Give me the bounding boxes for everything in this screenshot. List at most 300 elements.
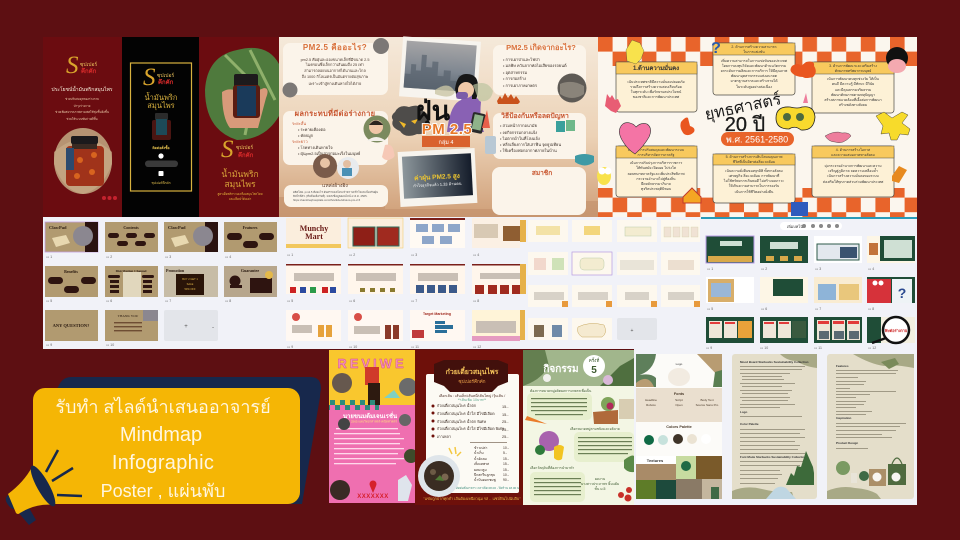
panel: PM2.5 infographic [279,36,598,217]
slide: features document: Features [836,364,849,368]
slide: brand board: Headline [645,398,657,402]
slide 1 [45,222,98,252]
card: members [492,167,586,215]
service list: รับทำ สไลด์นำเสนออาจารย์ [55,396,271,417]
icon: megaphone [6,463,59,525]
heading: PM 2.5 dust: ฝุ่น [416,96,451,128]
icons: shirts and mask [556,120,594,166]
center gold frame [130,63,192,191]
slides row 2 [528,252,700,275]
card: causes of PM2.5: PM2.5 เกิดจากอะไร? [506,42,576,52]
icon: phone [158,153,164,159]
slide numbers: ▭ 7 [411,299,417,303]
megaphone sound lines [46,450,82,496]
card: body effects: ระยะสั้น [292,119,306,126]
slide numbers: ▭ 9 [46,343,52,347]
activity credit [581,477,619,491]
menu noodle list: เกาเหลา [437,435,451,439]
menu noodle list: 15.- [502,413,509,417]
poster figures [332,367,417,405]
slide 1: ClawPad [49,225,67,230]
redacted phone number [145,160,178,167]
slide numbers: ▭ 1 [287,253,293,257]
poster header [523,350,634,386]
mascot: question mark: ? [711,40,721,57]
left jar photo [54,128,112,194]
strategy card 4: ให้ทันสมัย เปิดเผย โปร่งใส [636,165,677,170]
slide: mood board document: Color Palette [740,422,759,426]
slide numbers: ▭ 4 [868,267,874,271]
strategy card 3: คนดี มีความรู้ มีทักษะ มีวินัย [832,81,874,86]
panel: activity poster [523,350,634,505]
strategy card 1: ของชาติและการพัฒนาประเทศ [633,95,680,99]
right logo: S [221,136,234,163]
right title: สมุนไพร [224,179,256,190]
strategy card 1: รวมถึงการสร้างความสงบเรียบร้อย [630,84,682,89]
slide numbers: ▭ 7 [815,307,821,311]
slide numbers: ▭ 3 [165,255,171,259]
panel: green chalkboard slide deck overview [701,217,917,349]
service list: Poster , แผ่นพับ [101,481,225,501]
card: causes of PM2.5 [493,42,586,95]
slide 9: ANY QUESTION? [53,323,89,328]
decorative rays [449,447,461,456]
activity credit: ชั้น ม.5 [595,486,606,491]
child photo [364,116,390,142]
slide 2 [105,222,158,252]
menu noodle list: ก๋วยเตี๋ยวสมุนไพร น้ำตก พิเศษ [437,418,486,425]
polaroid: PM2.5 news [398,148,477,207]
slides row 3: พิษต่อร่างกาย [884,328,907,333]
strategy card 5: เศรษฐกิจ สิ่งแวดล้อม การพัฒนาที่ [729,173,780,178]
strategy card 2: เพิ่มความสามารถในการแข่งขันของประเทศ [721,58,788,63]
slide numbers: ▭ 12 [473,345,481,349]
left logo: S [66,52,79,79]
strategy card 2: มาตรฐานสากลและสร้างรายได้ [731,78,777,83]
menu title banner [434,360,508,392]
menu noodle list: เลือกเส้น : เส้นเล็ก/เส้นหมี่/เส้นใหญ่ /วุ้นเส้น / [439,392,505,399]
polaroid: hazy city [399,36,481,102]
center title: น้ำมันพริก [145,92,177,102]
slide 7: BUY 2 GET 1 [182,277,198,281]
right title [221,168,259,190]
strategy card 2: พัฒนาอุตสาหกรรมแห่งอนาคต [731,74,778,79]
menu noodle list: 25.- [502,435,509,439]
panel: 20-year national strategy [597,37,917,217]
slide 3 [410,218,465,248]
strategy card 1 [616,62,697,112]
slide: brand board: Script [675,398,683,402]
rainbow strip [701,217,917,219]
card: references [284,182,388,207]
strategy card 3: เน้นการพัฒนาคนทุกช่วงวัย ให้เป็น [827,75,879,82]
slide numbers: ▭ 8 [225,299,231,303]
skyline silhouette [279,185,598,217]
menu noodle list [432,392,509,439]
strategy card 4: กระจายอำนาจไปสู่ท้องถิ่น [636,176,676,181]
fire illustration [497,93,520,104]
toolbar [780,222,842,230]
menu divider and extras: 15.- [503,462,509,466]
left heading: ประโยชน์น้ำมันพริกสมุนไพร [51,84,113,93]
checker top [598,37,917,66]
menu noodle list: 25.- [502,420,509,424]
card: body effects: • โรคทางเดินหายใจ [298,145,333,150]
slides row 3 [286,310,520,341]
card: prevention: วิธีป้องกันหรือลดปัญหา [501,111,569,120]
slide numbers: ▭ 5 [707,307,713,311]
card: prevention: • หลีกเลี่ยงการใส่เสาฟืน จุดธูปเทียน [500,142,561,148]
strategy card 5: เน้นความยั่งยืนของทุกมิติ ทั้งทางสังคม [725,168,783,174]
slide: features document [827,354,914,499]
right logo: คึกคัก [238,151,254,159]
card: members: สมาชิก [532,169,552,177]
card: body effects: ระยะยาว [292,139,308,144]
center jar [152,113,171,140]
slides row 3: Target Marketing [423,312,451,316]
slide numbers: ▭ 10 [349,345,357,349]
strategy card 4: ยึดหลักธรรมาภิบาล [641,182,671,186]
center title [145,92,177,110]
dust monster [392,106,429,136]
slide: brand board: Roboto [646,403,656,407]
activity credit: นางสาวประภาพร ยิ้มแย้ม [581,481,619,486]
slide numbers: ▭ 3 [815,267,821,271]
slide numbers: ▭ 10 [760,346,768,350]
mascot: orange splash [790,62,816,78]
activity text card 1: ต้องการหมวดหมู่ผลิตผลการเกษตรเพื่อเป็น [530,387,592,393]
woman with mask [435,74,493,132]
card: references: แหล่งอ้างอิง [322,182,348,189]
card: what is PM2.5: ไมครอนซึ่งเล็กกว่าเส้นผมถึง 25 เท่า [305,61,364,67]
slide numbers: ▭ 5 [46,299,52,303]
strategy card 1: ในทุกระดับ เพื่อรักษาผลประโยชน์ [631,89,682,95]
toolbar: เพิ่มบทโน้ต [787,224,806,229]
noodle bowl photo [418,455,460,497]
left benefits text: บำรุงร่างกาย [74,104,91,109]
strategy card 3: สร้างสภาพแวดล้อมที่เอื้อต่อการพัฒนา [824,97,882,102]
mascot: heart [619,123,651,154]
slide 2: Contents [123,225,139,230]
menu card [426,374,519,493]
slide numbers: ▭ 9 [706,346,712,350]
slide: mood board document: Font Mode Starbucks Sustainability Collection [740,455,806,459]
icon: dust ball top [373,38,389,54]
slide numbers [707,267,874,311]
badge: group 4: กลุ่ม 4 [439,140,453,146]
contact text: ติดต่อสั่งซื้อ [152,144,170,150]
title: strategy 20 years: ยุทธศาสตร์ [703,89,783,125]
slide: Munchy Mart cover: Munchy [300,224,328,233]
strategy card 2: โดยการลงทุนวิจัยและพัฒนาด้านนวัตกรรม [722,63,786,69]
poster heading: REVIWE [337,356,407,371]
menu noodle list: 15.- [502,405,509,409]
strategy card 6: มุ่งกระจายอำนาจการพัฒนาและความ [824,164,882,169]
slide numbers: ▭ 12 [868,346,876,350]
card: references: พิษใกล้ตัว. [สืบค้นเมื่อวันที่]. แหล่งข้อมูลออนไลน์ ๔ ต.ค. 2565. [293,194,368,198]
strategy card 2: 2. ด้านการสร้างความสามารถ [731,45,777,49]
mascot: yellow star cross [876,112,910,140]
slides row 2 [706,277,915,303]
slide 2 [348,218,403,248]
polaroid: PM2.5 news: กำไรธุรกิจแล้ว 1.33 ล้านคน [413,181,462,189]
strategy card 3: ศักยภาพทรัพยากรมนุษย์ [835,69,871,74]
vegetables basket [593,397,634,424]
tomatoes [618,487,632,502]
mascot: blue clapper [791,202,808,216]
card: what is PM2.5: สามารถลอยบนอากาศได้นานและไกล [304,68,366,73]
slide numbers: ▭ 7 [165,299,171,303]
panel: Diamond Grade slide deck overview [520,217,701,349]
slide numbers: ▭ 11 [411,345,419,349]
slide 4 [224,222,277,252]
strategy card 6: เจริญสู่ภูมิภาค ลดความเหลื่อมล้ำ [828,168,878,173]
slide 7 [164,266,218,297]
center logo: ซุปเปอร์ [157,72,174,79]
checker band [329,400,379,410]
left benefits text: ช่วยเพิ่มสมรรถภาพทางเพศให้ชุ่มชื้นยิ่งขึ้น [55,109,109,115]
panel: herb chili oil brochure [43,37,279,217]
slide numbers: ▭ 2 [761,267,767,271]
menu noodle list: ก๋วยเตี๋ยวสมุนไพร น้ำตก [437,402,476,409]
card: body effects [283,107,388,165]
slide 4 [472,218,520,248]
cabbage and pepper [535,431,564,460]
poster sub-heading: ม.4/6 2565 แผนวิทยาศาสตร์-คณิตศาสตร์ [343,420,397,424]
slides row 1 [528,220,700,242]
strategy card 3: และมีคุณธรรมจริยธรรม [835,87,871,93]
heading: PM 2.5 dust [416,96,472,138]
heading: PM 2.5 dust: PM 2.5 [422,121,472,138]
strategy card 3: 3. ด้านการพัฒนาและเสริมสร้าง [829,64,877,68]
poster header: กิจกรรม [543,363,579,375]
center logo: คึกคัก [158,78,174,86]
slide 10 [105,310,158,341]
slide: brand board: Colors Palette [666,425,692,429]
menu divider and extras: 10.- [503,446,509,450]
leaf right [624,456,634,472]
card: prevention: • งดกิจกรรมกลางแจ้ง [500,130,537,135]
strategy card 6: 4. ด้านการสร้างโอกาส [836,147,871,152]
icon: dust ball left [282,82,298,98]
card: what is PM2.5: pm2.5 คือฝุ่นละอองขนาดเล็กที่มีขนาด 2.5 [301,56,369,63]
menu divider and extras: 10.- [503,473,509,477]
slide: brand board: Source Sans Pro [696,403,719,407]
mascot: pink hand [605,94,621,113]
menu divider and extras: ข้าวเปล่า [474,446,488,450]
card: body effects: • ระคายเคืองตอ [298,127,326,132]
menu noodle list: 25.- [502,428,509,432]
slide numbers: ▭ 6 [349,299,355,303]
activity text card 2: เลือกหมวดหมู่ตามชนิดและอธิบาย [570,426,620,431]
slide: mood board document [732,354,817,499]
slide numbers: ▭ 4 [473,253,479,257]
activity text card 3 [530,465,585,502]
slides row 2: ? [898,285,906,301]
slides row 3 [706,317,915,343]
left logo: ซุปเปอร์ [80,61,97,68]
menu divider and extras [456,442,520,490]
menu noodle list: ก๋วยเตี๋ยวสมุนไพร น้ำใส มีไข่มีเลือด พิเศษ [437,425,505,432]
slides row 4: + [631,328,634,334]
right subtitle: และเห็ดนำ้ตับเต่า [229,195,252,201]
menu divider and extras: เห็ดเทพรส [474,460,490,466]
page dots [102,196,117,200]
slide numbers: ▭ 10 [106,343,114,347]
center title: สมุนไพร [147,101,175,110]
slide 7: 50% OFF [184,287,196,291]
card: references: https://samitivejhospitals.com/th/article/what-is-pm-2-5 [293,198,361,202]
panel: review poster [329,350,418,503]
menu divider and extras: น้ำเก็บ [474,449,484,455]
slide 8 [224,266,277,297]
mascot: yellow duck [597,167,612,185]
photos: patients [313,154,359,179]
menu divider and extras: 15.- [503,468,509,472]
panel: noodle menu [415,350,523,505]
strategy card 2: ในการแข่งขัน [743,49,765,54]
navy backing shape [54,377,321,504]
slide numbers: ▭ 2 [106,255,112,259]
slide 6 [105,266,158,297]
slide 3 [164,222,218,252]
checker bottom [598,188,917,217]
strategy card 5: เน้นการใช้ชีวิตอย่างยั่งยืน [735,189,774,194]
activity text card 2 [570,426,634,462]
slide: Munchy Mart cover: Mart [305,232,323,241]
slide 3: ClawPad [168,225,186,230]
strategy card 1: 1.ด้านความมั่นคง [633,63,679,72]
icon: facebook [158,171,164,176]
slides row 1 [706,236,915,263]
strategy card 3 [812,62,894,113]
strategy card 5 [713,154,795,203]
slide: features document: Product Design [836,441,858,445]
slides row 3 [528,285,700,307]
card: causes of PM2.5: • การเผาภาคเกษตร [503,83,538,88]
slide numbers: ▭ 6 [761,307,767,311]
card: prevention: • ใช้เครื่องฟอกอากาศภายในบ้าน [500,148,557,153]
poster body text [334,428,404,464]
slide: Munchy Mart cover [286,218,341,248]
badge: years [721,132,794,146]
card: causes of PM2.5: • การเผาป่าและไฟป่า [503,57,540,62]
left benefits text: ช่วยให้ระบบขับถ่ายดีขึ้น [66,116,98,121]
right logo [221,136,254,163]
card: what is PM2.5 [283,42,388,95]
menu title banner: ซุปเปอร์คึกคัก [459,378,486,385]
strategy card 4: การบริหารจัดการภาครัฐ [638,153,675,157]
card: causes of PM2.5: • อุตสาหกรรม [503,70,528,76]
mascot: orange flame [680,118,694,135]
strategy card 2 [713,43,795,95]
activity credit: ผลงาน [595,477,606,481]
slide 5: Benefits [64,269,78,274]
carrot [525,416,547,424]
slide: mood board document: Mood Board Starbucks Sustainability Collection [740,360,809,364]
strategy card 6: และความเสมอภาคทางสังคม [831,153,875,157]
slide numbers: ▭ 4 [225,255,231,259]
card: body effects: ผลกระทบที่มีต่อร่างกาย [295,107,375,118]
strategy card 6: เน้นการสร้างความมั่นคงของระบบ [827,173,879,178]
slide: brand board: Body Text [700,398,714,402]
slide numbers: ▭ 6 [106,299,112,303]
badge: years: พ.ศ. 2561-2580 [726,134,788,144]
exhaust photo [558,74,586,102]
slide numbers: ▭ 9 [287,345,293,349]
strategy card 5: ชีวิตที่เป็นมิตรต่อสิ่งแวดล้อม [733,158,775,164]
strategy card 6: ส่งเสริมให้ทุกภาคส่วนร่วมพัฒนาประเทศ [823,179,884,185]
strategy card 4: ทุจริตประพฤติมิชอบ [641,187,671,192]
card: causes of PM2.5: • มลพิษ ควันจากท่อไอเสียของรถยนต์ [503,63,567,68]
slide numbers: ▭ 8 [473,299,479,303]
slide: features document: Inspiration [836,416,852,420]
right title: น้ำมันพริก [221,168,259,179]
card: what is PM2.5: PM2.5 คืออะไร? [303,42,367,52]
mascot: lips [825,132,851,143]
icon: nose [382,145,395,160]
slide numbers: ▭ 2 [349,253,355,257]
mascot: pencil [892,166,907,183]
slide 10: THANK YOU [118,314,139,318]
slide numbers: ▭ 8 [868,307,874,311]
mascot: house [683,188,701,203]
slide: brand board: Open [675,403,683,407]
poster sub-heading [343,411,398,424]
poster header: 5 [591,365,597,376]
icons: cone and bottle [482,110,496,154]
title: strategy 20 years: 20 ปี [725,114,765,136]
menu divider and extras: ติดต่อสั่งอาหาร เวลาเปิด 08.00 - ปิดร้าน 18.00 น. [456,486,520,490]
left benefits text: ช่วยปรับสมดุลของร่างกาย [65,97,99,102]
card: prevention: • สวมหน้ากากอนามัย [500,123,537,128]
slide 4: Features [243,225,258,230]
card: prevention [493,111,586,159]
service list: Infographic [112,452,214,474]
slide: brand board [636,354,722,499]
slide 8: Guarantee [241,268,259,273]
poster people [330,414,418,501]
slide numbers [706,346,876,350]
center logo: S [143,64,156,91]
slide numbers: ▭ 11 [814,346,822,350]
card: references: ผลิตโดย. pm2.5 คืออะไร อันตรายแค่ไหน ทำความเข้าใจและป้องกันฝุ่น [293,190,378,195]
service list [55,396,271,501]
menu footer: "แซ่บถูกปากทุกคำ เส้นต้องเหนียวนุ่ม รส .. แซบ์ฟินไปนับสิบ" [423,496,521,502]
slide numbers [46,255,231,347]
call to action banner [6,377,321,525]
slide numbers: ▭ 1 [707,267,713,271]
menu divider and extras: ปีกสกรีนลูกชุบ [474,472,495,478]
menu divider and extras: 5.- [503,451,507,455]
left logo [66,52,97,79]
menu title banner: ก๋วยเตี๋ยวสมุนไพร [446,366,499,376]
slide: brand board: Fonts [674,392,684,396]
menu noodle list: ก๋วยเตี๋ยวสมุนไพร น้ำใส มีไข่มีเลือด [437,410,495,417]
strategy card 5: 5. ด้านการสร้างการเติบโตบนคุณภาพ [726,154,783,160]
strategy card 3: สร้างพลังทางสังคม [839,103,867,107]
activity text card 1 [527,387,592,420]
slide 6: Distribution Channel [116,269,146,273]
title: strategy 20 years [703,89,783,136]
menu divider and extras: น้ำปันดอกชมพู [474,477,496,482]
strategy card 2: ในระดับสูงอย่างต่อเนื่อง [736,84,772,89]
facebook name: ซุปเปอร์คึกคัก [151,181,171,186]
strategy card 4: เน้นการปรับปรุงการบริหารราชการ [630,161,682,166]
slide 9 [45,310,98,341]
menu divider and extras: ผลมะตูม [474,468,487,472]
slides row 2 [286,264,520,294]
